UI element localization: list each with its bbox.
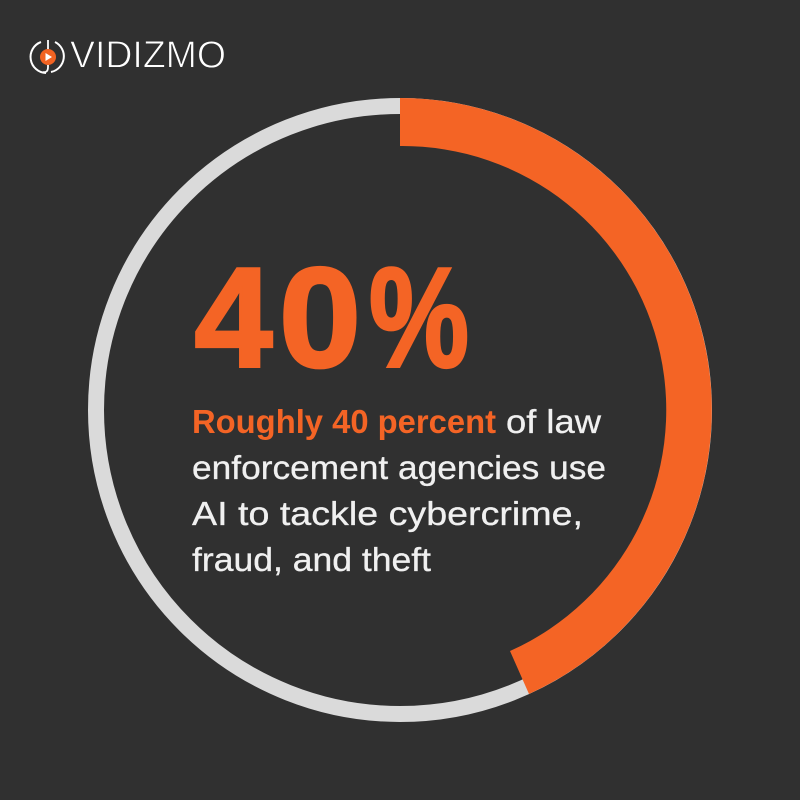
- logo: VIDIZMO: [31, 34, 226, 76]
- description text: [192, 403, 606, 578]
- big stat: 40%: 4: [194, 238, 273, 398]
- line 4: fraud, and theft: [192, 541, 431, 578]
- line 1: of law: [506, 403, 601, 440]
- chart track: [96, 106, 704, 714]
- chart highlighted segment: [400, 98, 712, 694]
- line 3: AI to tackle cybercrime,: [192, 495, 583, 532]
- big stat: 40%: [194, 238, 469, 398]
- logo wordmark: VIDIZMO: [70, 34, 226, 76]
- line 1: Roughly 40 percent: [192, 403, 496, 440]
- big stat: 40%: %: [369, 238, 469, 398]
- big stat: 40%: 0: [279, 238, 361, 398]
- line 2: enforcement agencies use: [192, 449, 606, 486]
- icon: logo play mark: [31, 40, 64, 73]
- donut chart: 40 percent: [96, 98, 712, 714]
